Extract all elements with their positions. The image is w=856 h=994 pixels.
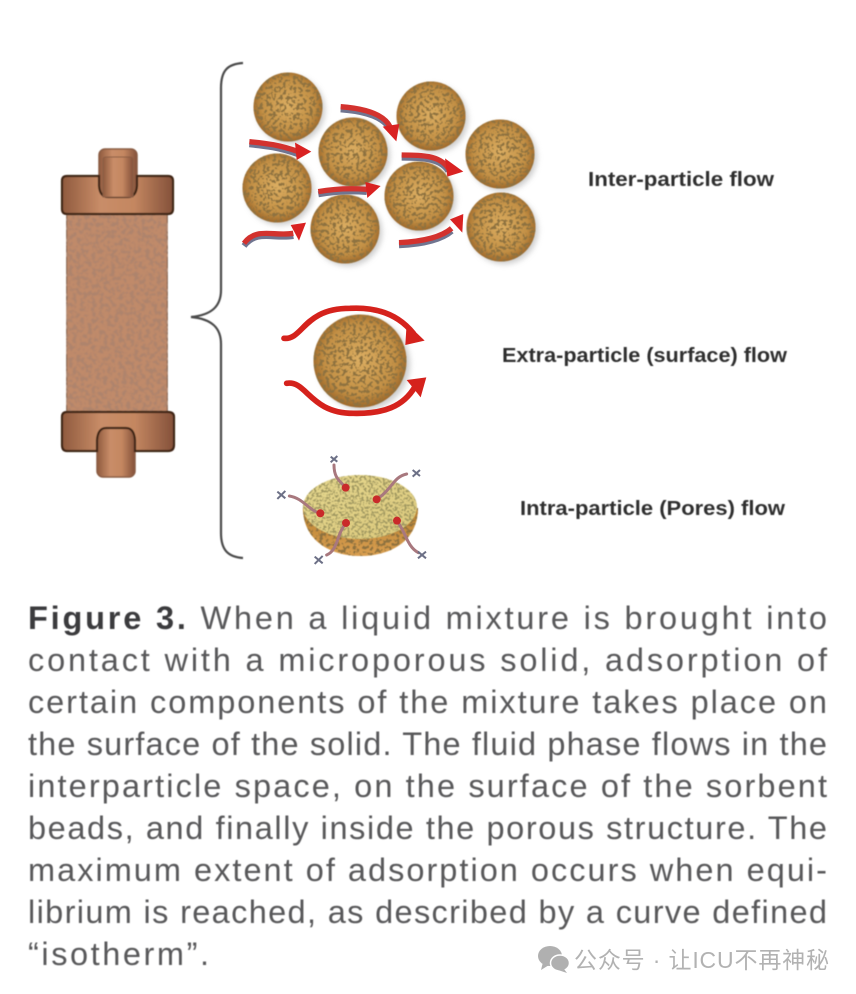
disc top surface [303,475,417,539]
column body filled with sorbent [66,214,168,412]
disc side [303,508,418,556]
flow arrows [244,107,463,246]
panel: inter-particle beads and arrows [242,72,538,266]
curved arrows around bead [284,308,426,413]
beads [242,72,536,264]
caption text block [28,600,828,972]
watermark text: 公众号 · 让ICU不再神秘 [574,947,829,973]
label: inter-particle flow: Inter-particle flow [588,169,774,191]
caption text block: maximum extent of adsorption occurs when equi- [28,852,827,888]
icon: chat bubbles [538,946,570,973]
caption text block: interparticle space, on the surface of the sorbent [28,768,827,804]
top cap [62,176,173,214]
large bead [314,314,406,408]
brace bracket [191,63,243,558]
caption text block: beads, and finally inside the porous structure. The [28,810,827,846]
bottom nozzle [97,428,135,477]
icon: sorbent column cartridge [62,149,174,477]
caption text block: “isotherm”. [28,936,209,972]
panel: extra-particle surface flow [284,308,426,413]
top nozzle inner [103,157,133,197]
bead shadow [318,318,410,410]
panel: intra-particle pore flow [277,456,426,564]
caption text block: librium is reached, as described by a curve defined [28,894,827,930]
label: extra-particle flow: Extra-particle (surface) flow [502,345,787,367]
caption text block: certain components of the mixture takes place on [28,684,827,720]
caption text block: Figure 3. When a liquid mixture is brought into [28,600,827,636]
pore flow lines [277,456,426,564]
caption text block: the surface of the solid. The fluid phase flows in the [28,726,827,762]
bottom cap [62,412,174,451]
watermark [538,946,829,973]
label: intra-particle flow: Intra-particle (Pores) flow [520,498,785,520]
top nozzle [99,149,137,199]
caption text block: contact with a microporous solid, adsorption of [28,642,828,678]
bead shadows [246,76,538,266]
